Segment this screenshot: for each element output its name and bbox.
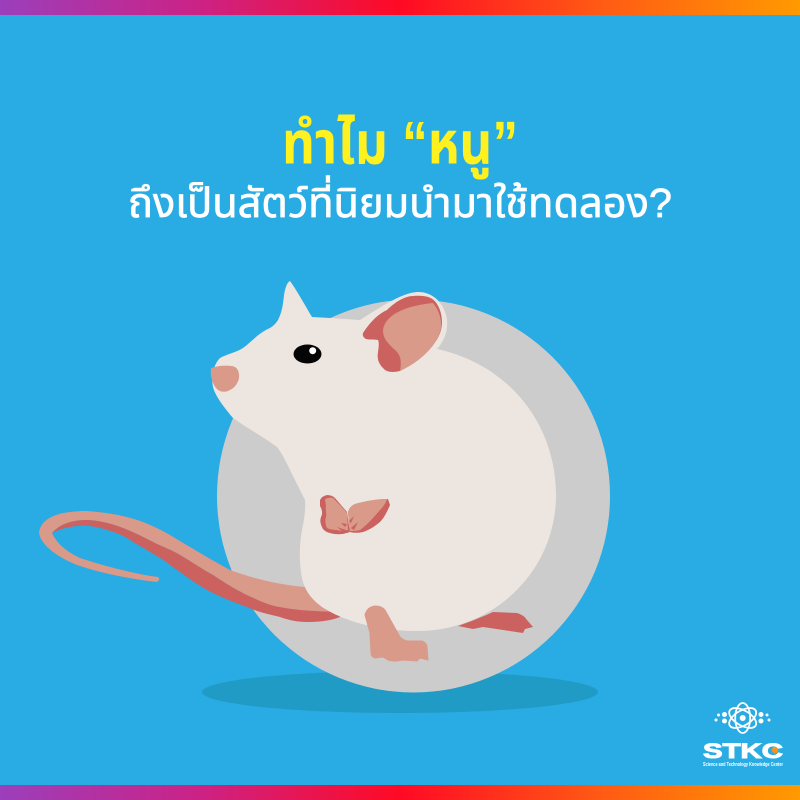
STKC logo <box>703 703 783 768</box>
logo wordmark: STKC <box>703 740 783 763</box>
eye ball <box>294 344 322 364</box>
right paw dark <box>348 499 390 533</box>
tail light side <box>39 511 340 612</box>
grey circle backdrop <box>217 300 610 692</box>
body and head <box>212 281 556 631</box>
right paw <box>337 499 390 533</box>
eye highlight <box>309 347 316 354</box>
title line 2: ถึงเป็นสัตว์ที่นิยมนำมาใช้ทดลอง? <box>128 175 672 226</box>
tail <box>39 511 340 622</box>
eye <box>294 344 322 364</box>
tail dark side <box>52 520 340 622</box>
ear inner dark <box>363 296 442 372</box>
far back foot <box>458 612 533 633</box>
left paw light <box>325 498 348 531</box>
logo dots <box>714 712 770 724</box>
ground shadow <box>202 671 598 713</box>
paw fingers <box>337 516 358 533</box>
left paw <box>320 495 350 534</box>
front foot <box>365 606 428 661</box>
mouse illustration <box>39 281 556 661</box>
nose <box>211 366 239 392</box>
title <box>128 110 672 226</box>
ear <box>363 296 442 372</box>
ear inner light <box>383 303 441 371</box>
logo atom icon <box>726 703 759 733</box>
top gradient bar <box>0 0 800 15</box>
title line 1: ทำไม “หนู” <box>282 110 518 180</box>
bottom gradient bar <box>0 785 800 800</box>
left paw dark <box>320 495 350 534</box>
right paw light <box>348 499 387 531</box>
logo orange dot <box>772 747 778 753</box>
